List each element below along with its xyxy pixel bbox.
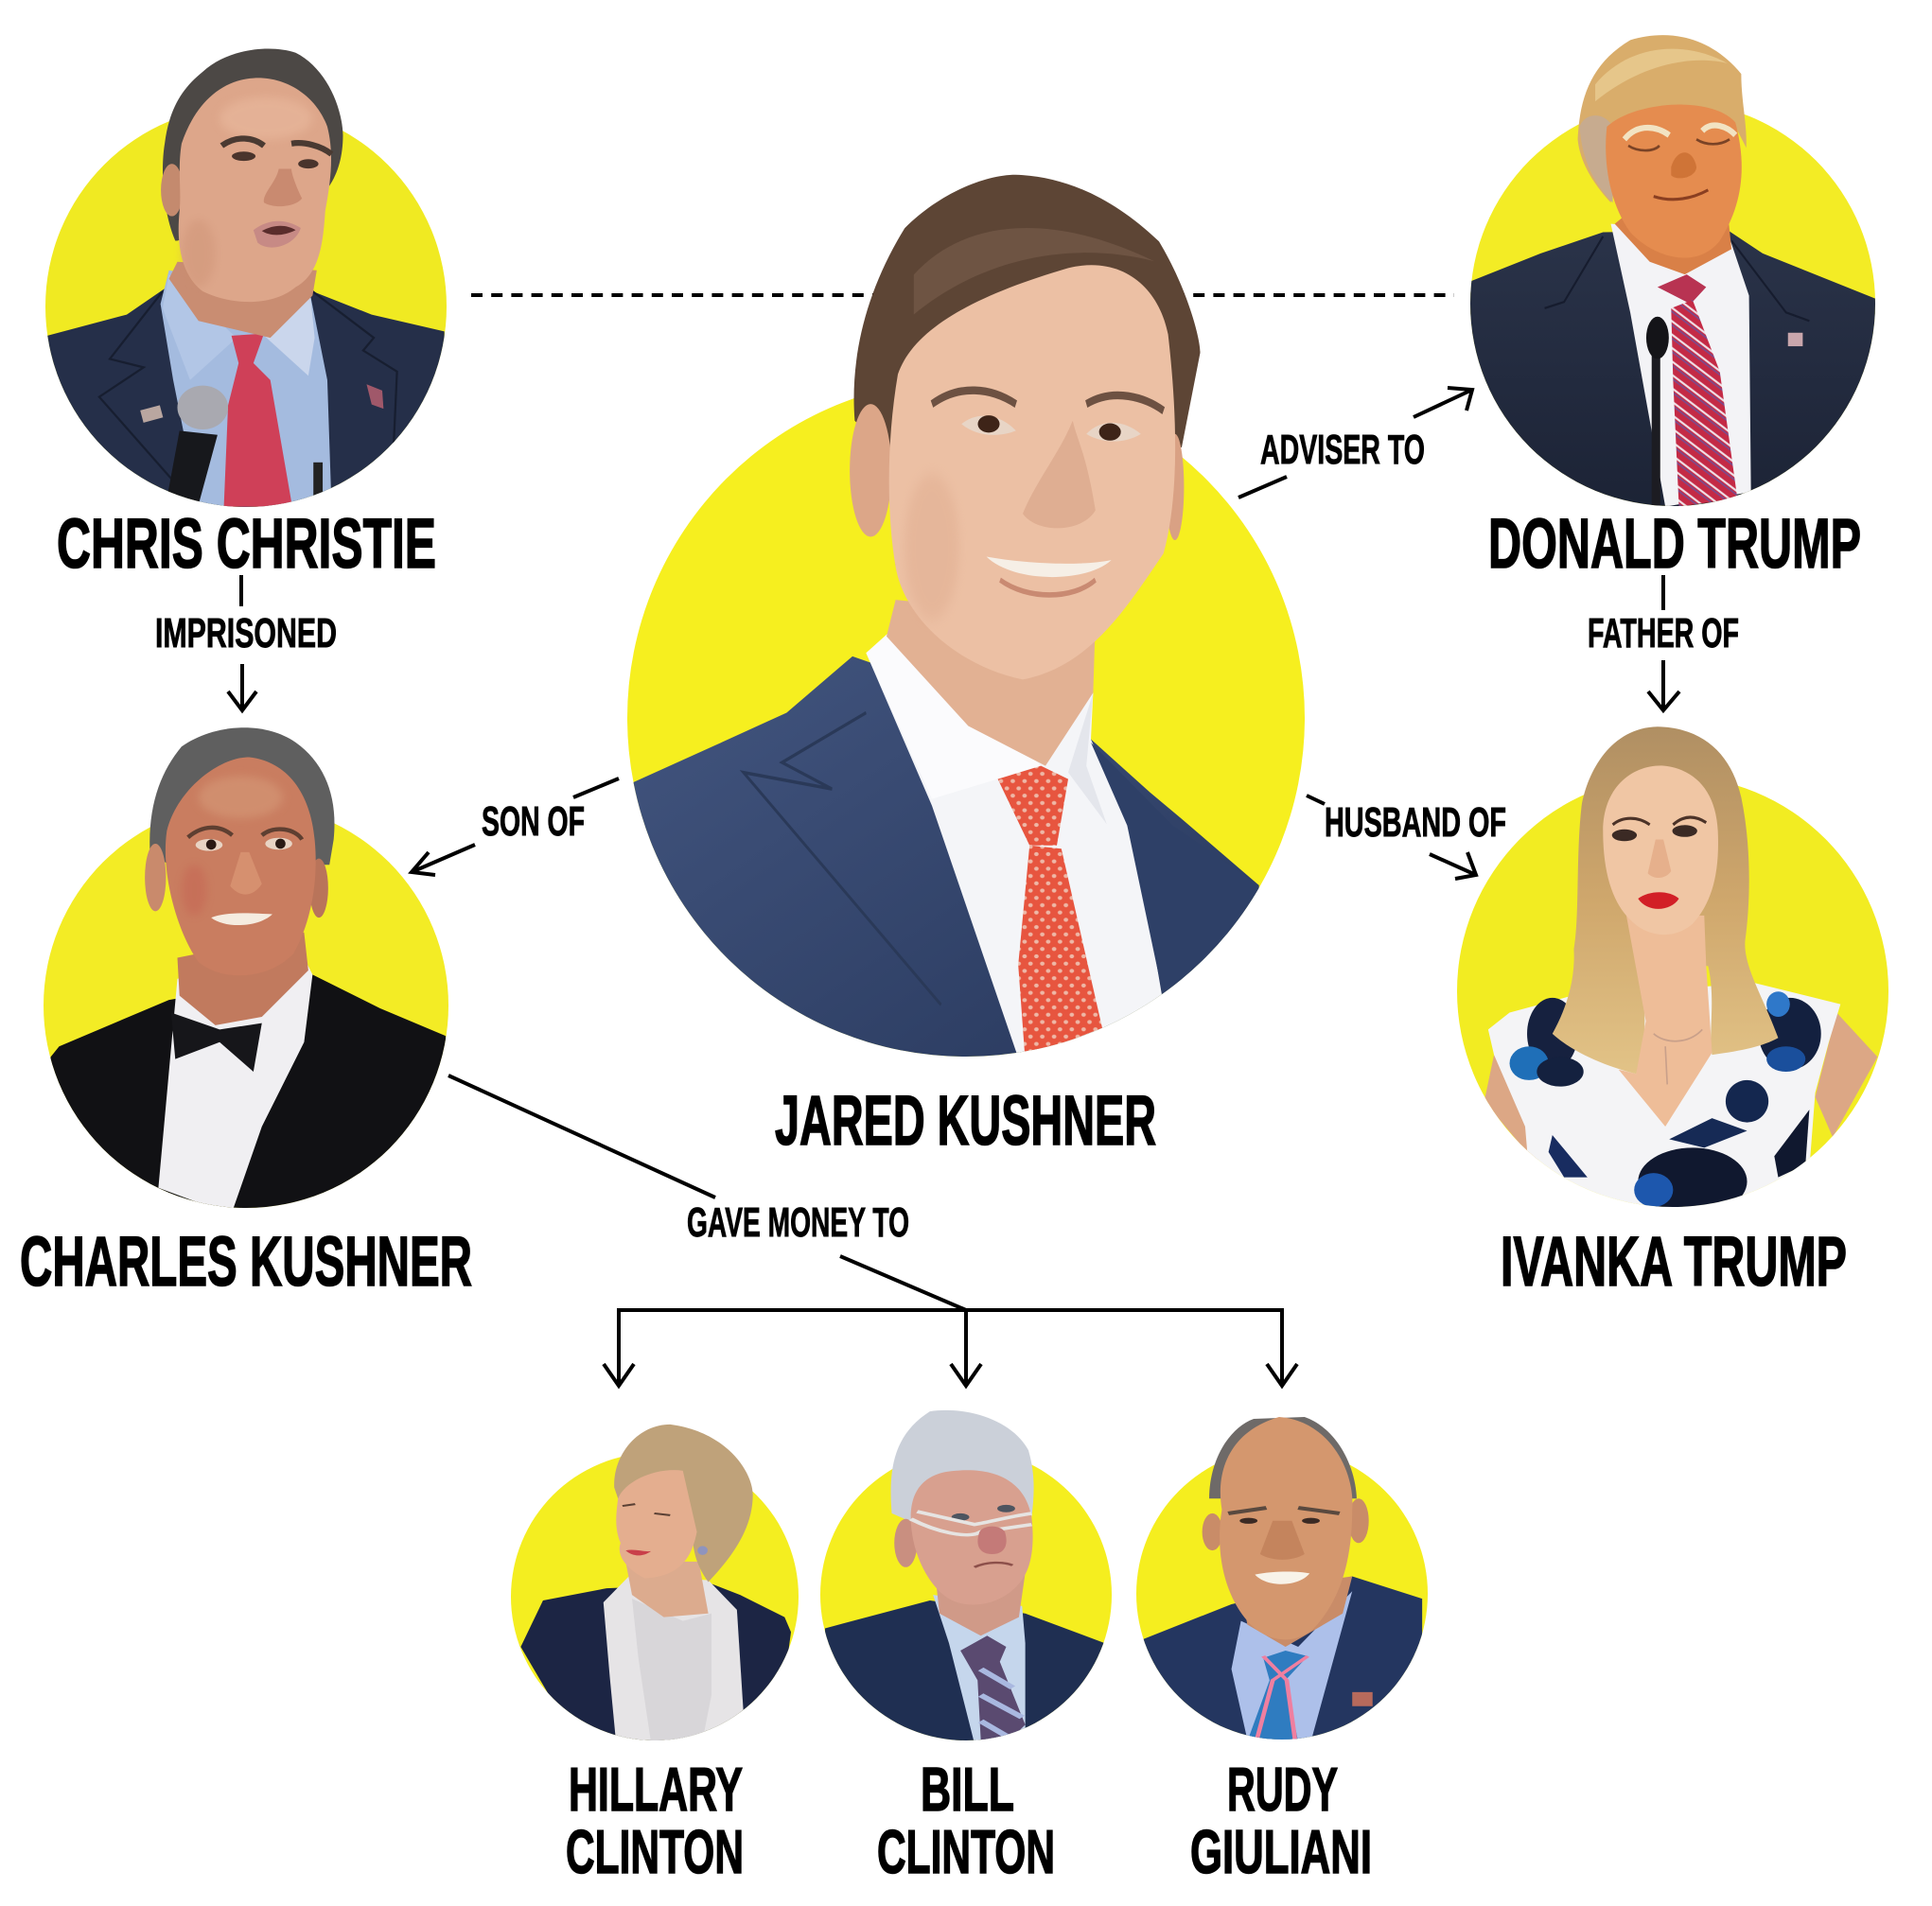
yellow circle (820, 1449, 1112, 1740)
dotted line: Christie to Trump (471, 293, 1454, 297)
panel: Ivanka Trump (1457, 726, 1888, 1301)
portrait: Rudy Giuliani (1142, 1417, 1425, 1743)
connector: Father of (1588, 575, 1739, 710)
yellow circle (627, 379, 1305, 1057)
portrait: Charles Kushner (43, 727, 452, 1211)
arrow: Christie to Charles (228, 664, 256, 710)
arrow: to Hillary (604, 1308, 634, 1386)
label: Adviser to: ADVISER TO (1260, 427, 1425, 473)
label: Imprisoned: IMPRISONED (155, 610, 337, 656)
name: Hillary Clinton: HILLARY (569, 1755, 743, 1824)
yellow circle (1470, 101, 1875, 506)
name: Bill Clinton (877, 1755, 1055, 1886)
name: Bill Clinton: BILL (921, 1755, 1014, 1824)
arrow: Jared to Ivanka (1430, 852, 1476, 879)
panel: Hillary Clinton (511, 1425, 799, 1886)
yellow circle (1136, 1448, 1428, 1740)
name: Rudy Giuliani (1190, 1755, 1372, 1886)
name: Chris Christie: CHRIS CHRISTIE (57, 504, 436, 583)
label: Son of: SON OF (482, 798, 585, 845)
panel: Donald Trump (1463, 35, 1879, 583)
panel: Bill Clinton (820, 1410, 1115, 1886)
name: Charles Kushner: CHARLES KUSHNER (20, 1222, 472, 1301)
name: Rudy Giuliani: GIULIANI (1190, 1817, 1372, 1886)
arrow: Jared to Trump (1414, 388, 1472, 417)
arrow: Jared to Charles (412, 845, 475, 875)
arrow: Trump to Ivanka (1648, 660, 1679, 710)
portrait: Donald Trump (1463, 35, 1879, 528)
portrait: Hillary Clinton (520, 1425, 791, 1743)
panel: Chris Christie (43, 49, 448, 583)
connector: Adviser to (1238, 388, 1472, 498)
name: Hillary Clinton (566, 1755, 744, 1886)
yellow circle (511, 1453, 799, 1740)
yellow circle (44, 803, 448, 1208)
portrait: Chris Christie (43, 49, 448, 528)
name: Rudy Giuliani: RUDY (1227, 1755, 1338, 1824)
label: Father of: FATHER OF (1588, 610, 1739, 656)
connector: Gave money to (448, 1075, 1297, 1386)
label: Husband of: HUSBAND OF (1325, 799, 1506, 846)
label: Gave money to: GAVE MONEY TO (687, 1199, 909, 1246)
arrow: to Rudy (1267, 1308, 1297, 1386)
panel: Rudy Giuliani (1136, 1417, 1428, 1886)
connector: Imprisoned (155, 575, 337, 710)
portrait: Jared Kushner (614, 175, 1259, 1104)
name: Jared Kushner: JARED KUSHNER (775, 1081, 1156, 1160)
yellow circle (1457, 776, 1888, 1207)
arrow: to Bill (951, 1310, 981, 1386)
portrait: Ivanka Trump (1484, 726, 1877, 1219)
panel: Jared Kushner (614, 175, 1305, 1160)
connector: Husband of (1307, 796, 1506, 879)
portrait: Bill Clinton (825, 1410, 1115, 1743)
name: Hillary Clinton: CLINTON (566, 1817, 744, 1886)
name: Bill Clinton: CLINTON (877, 1817, 1055, 1886)
connector: Son of (412, 778, 619, 875)
panel: Charles Kushner (20, 727, 472, 1301)
yellow circle (45, 106, 447, 507)
